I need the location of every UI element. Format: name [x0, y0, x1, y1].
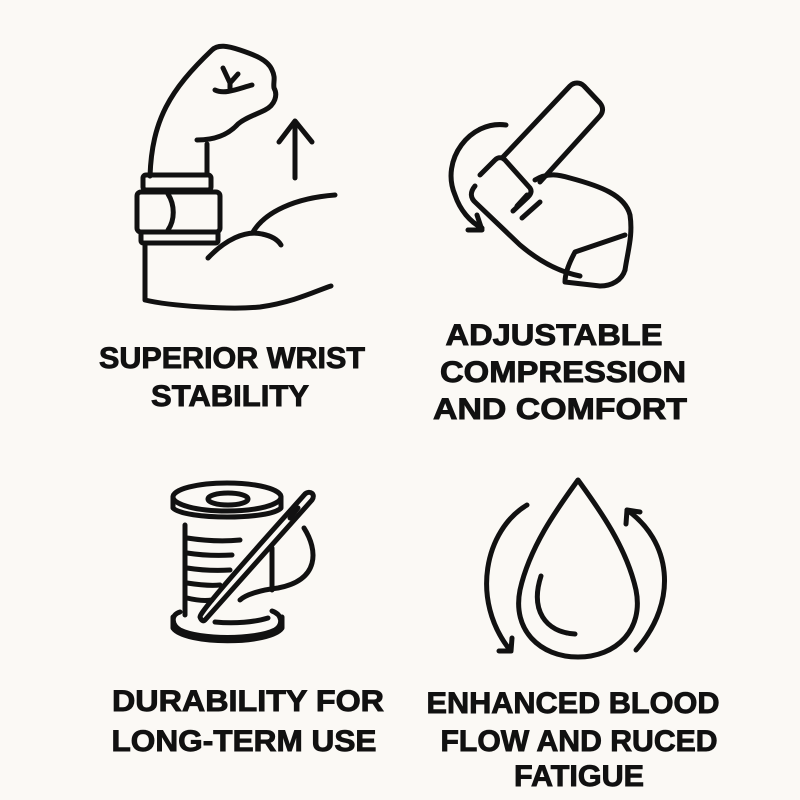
text: blood flow: ENHANCED BLOOD	[426, 687, 720, 720]
text: adjustable compression and comfort	[433, 319, 687, 426]
icon: adjustable strap	[451, 83, 631, 286]
text: adjustable compression and comfort: AND COMFORT	[433, 393, 687, 426]
icon: thread spool with needle	[173, 483, 313, 641]
text: durability: DURABILITY FOR	[112, 685, 384, 718]
text: durability: LONG-TERM USE	[112, 725, 376, 758]
icon: blood drop with circulation arrows	[487, 480, 665, 657]
text: blood flow: FATIGUE	[514, 760, 644, 793]
text: blood flow: FLOW AND RUCED	[440, 725, 718, 758]
text: adjustable compression and comfort: ADJUSTABLE	[446, 319, 662, 352]
icon: flexed arm with wrist brace	[137, 46, 335, 308]
text: durability	[112, 685, 384, 758]
icon: up arrow	[279, 121, 312, 178]
text: superior wrist stability: SUPERIOR WRIST	[99, 342, 365, 375]
text: superior wrist stability: STABILITY	[151, 380, 309, 413]
text: adjustable compression and comfort: COMPRESSION	[440, 356, 686, 389]
text: superior wrist stability	[99, 342, 365, 413]
text: blood flow	[426, 687, 720, 793]
